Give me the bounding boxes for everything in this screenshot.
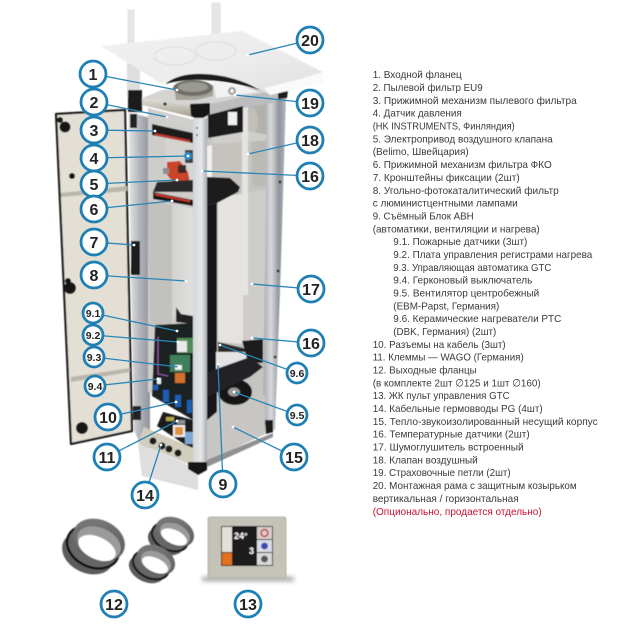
right rear post (263, 96, 286, 430)
parts legend: 18. Клапан воздушный (373, 454, 478, 466)
callout 11 (94, 421, 177, 470)
parts legend: 10. Разъемы на кабель (3шт) (373, 339, 506, 351)
callout 3 (81, 117, 155, 143)
callout 9.2: 9.2 (86, 330, 100, 342)
top corner block (190, 103, 210, 120)
callout 10 (95, 402, 176, 430)
callout 9.1: 9.1 (86, 308, 100, 320)
top plate (142, 84, 280, 106)
door (56, 110, 132, 444)
parts legend: 1. Входной фланец (373, 69, 462, 81)
lower back wall (207, 395, 265, 440)
parts legend: 2. Пылевой фильтр EU9 (373, 82, 483, 94)
callout 9.4: 9.4 (88, 381, 102, 393)
parts legend: (HK INSTRUMENTS, Финляндия) (373, 121, 515, 133)
vertical partition strip (242, 105, 248, 295)
callout 18 (248, 127, 323, 154)
AVN block (152, 323, 193, 420)
parts legend: с люминистцентными лампами (373, 198, 518, 210)
callout 1 (80, 61, 177, 90)
callout 9.4 (85, 376, 158, 396)
callout 4: 4 (90, 151, 99, 168)
output flanges (55, 510, 199, 589)
callout 5 (81, 171, 177, 197)
safety loop (229, 88, 235, 94)
callout 20 (248, 27, 323, 55)
callout 16 lower: 16 (302, 336, 320, 353)
callout 2: 2 (90, 95, 99, 112)
parts legend: 5. Электропривод воздушного клапана (373, 133, 553, 145)
callout 14 (132, 445, 161, 508)
parts legend: 14. Кабельные гермовводы PG (4шт) (373, 403, 543, 415)
mounting brackets (127, 3, 220, 98)
callout 17: 17 (302, 282, 320, 299)
damper shelf (212, 131, 268, 144)
parts legend: 9. Съёмный Блок АВН (373, 210, 474, 222)
parts legend: (DBK, Германия) (2шт) (393, 326, 496, 338)
parts legend: 6. Прижимной механизм фильтра ФКО (373, 159, 552, 171)
front corner post (193, 118, 207, 465)
callout 14: 14 (136, 488, 154, 505)
callout 2 (81, 89, 167, 117)
parts legend: (EBM-Papst, Германия) (393, 300, 499, 312)
parts legend: 12. Выходные фланцы (373, 364, 477, 376)
callout 9: 9 (219, 477, 228, 494)
callout 9.5: 9.5 (290, 410, 304, 422)
callout 6 (81, 196, 172, 222)
callout 9 (210, 364, 236, 497)
parts legend: 9.2. Плата управления регистрами нагрева (393, 249, 592, 261)
parts legend: вертикальная / горизонтальная (373, 493, 519, 505)
lid (101, 31, 323, 98)
parts legend: 13. ЖК пульт управления GTC (373, 390, 510, 402)
left interior (148, 108, 194, 412)
parts legend: 9.3. Управляющая автоматика GTC (393, 262, 552, 274)
parts legend: 7. Кронштейны фиксации (2шт) (373, 172, 520, 184)
parts legend: (в комплекте 2шт ∅125 и 1шт ∅160) (373, 377, 541, 389)
parts legend: (Опционально, продается отдельно) (373, 506, 542, 518)
callout 9.1 (83, 303, 177, 331)
callout 7 (81, 229, 134, 255)
central black duct (207, 203, 217, 420)
illustration: ventilation unit cutaway (55, 3, 323, 589)
parts legend: 3. Прижимной механизм пылевого фильтра (373, 95, 577, 107)
callout 10: 10 (99, 410, 117, 427)
LCD control panel: 3 (249, 546, 254, 556)
callout 8 (81, 262, 186, 288)
LCD control panel: 24° (234, 531, 248, 541)
callout 12 (101, 591, 127, 617)
callout 6: 6 (90, 202, 99, 219)
parts legend: (Belimo, Швейцария) (373, 146, 469, 158)
terminal tray (157, 412, 213, 452)
parts legend: 15. Тепло-звукоизолированный несущий корпус (373, 416, 598, 428)
electric actuator (163, 161, 190, 184)
inlet flange (173, 80, 213, 100)
silencer (218, 189, 267, 344)
plinth (138, 443, 198, 490)
bottom corner block (188, 462, 207, 475)
cabinet left post (128, 90, 150, 460)
heater (216, 342, 252, 375)
callout 9.2 (83, 325, 178, 345)
parts legend: 9.5. Вентилятор центробежный (393, 288, 539, 300)
LCD control panel (202, 517, 294, 581)
callout 9.6 (220, 345, 307, 383)
housing floor (205, 405, 268, 460)
parts legend: 9.6. Керамические нагреватели PTC (393, 313, 562, 325)
callout 9.6: 9.6 (290, 368, 304, 380)
parts legend: (автоматики, вентиляции и нагрева) (373, 223, 540, 235)
callout 13: 13 (239, 597, 257, 614)
FKO clamp and shelf (153, 177, 240, 206)
controller box (208, 106, 243, 138)
callout 4 (81, 145, 188, 171)
parts legend: 9.1. Пожарные датчики (3шт) (393, 236, 527, 248)
callout 1: 1 (89, 67, 98, 84)
callout 9.3: 9.3 (87, 352, 101, 364)
temperature sensor box (242, 339, 263, 363)
callout 13 (235, 591, 261, 617)
callout 9.5 (234, 392, 307, 425)
callout 16 upper (202, 163, 323, 189)
dust filter (152, 112, 193, 143)
callout 11: 11 (99, 450, 116, 467)
callout 18: 18 (301, 133, 319, 150)
parts legend: 4. Датчик давления (373, 108, 462, 120)
parts legend: 19. Страховочные петли (2шт) (373, 467, 511, 479)
callout 12: 12 (105, 597, 123, 614)
callout 16 lower (252, 330, 324, 356)
callout 5: 5 (90, 177, 99, 194)
parts legend: 8. Угольно-фотокаталитический фильтр (373, 185, 559, 197)
fan duct (205, 357, 263, 405)
callout 19: 19 (301, 96, 319, 113)
callout 7: 7 (90, 235, 99, 252)
callout 19 (235, 90, 323, 116)
parts legend: 17. Шумоглушитель встроенный (373, 442, 524, 454)
pressure sensor (184, 150, 194, 163)
callout 9.3 (84, 347, 179, 367)
right side interior (207, 92, 285, 462)
callout 3: 3 (90, 123, 99, 140)
parts legend (373, 69, 598, 518)
filter bottom clip (176, 307, 193, 324)
callout 8: 8 (90, 268, 99, 285)
callout 20: 20 (301, 33, 319, 50)
temperature sensor bracket (207, 145, 212, 189)
callout 16 upper: 16 (301, 169, 319, 186)
parts legend: 9.4. Герконовый выключатель (393, 275, 533, 287)
parts legend: 16. Температурные датчики (2шт) (373, 429, 530, 441)
parts legend: 11. Клеммы — WAGO (Германия) (373, 352, 524, 364)
charcoal filter (172, 203, 193, 322)
bottom front rail with glands (138, 427, 193, 466)
callout 15: 15 (285, 450, 303, 467)
parts legend: 20. Монтажная рама с защитным козырьком (373, 480, 577, 492)
callout 17 (252, 276, 324, 302)
callout 15 (233, 427, 307, 470)
